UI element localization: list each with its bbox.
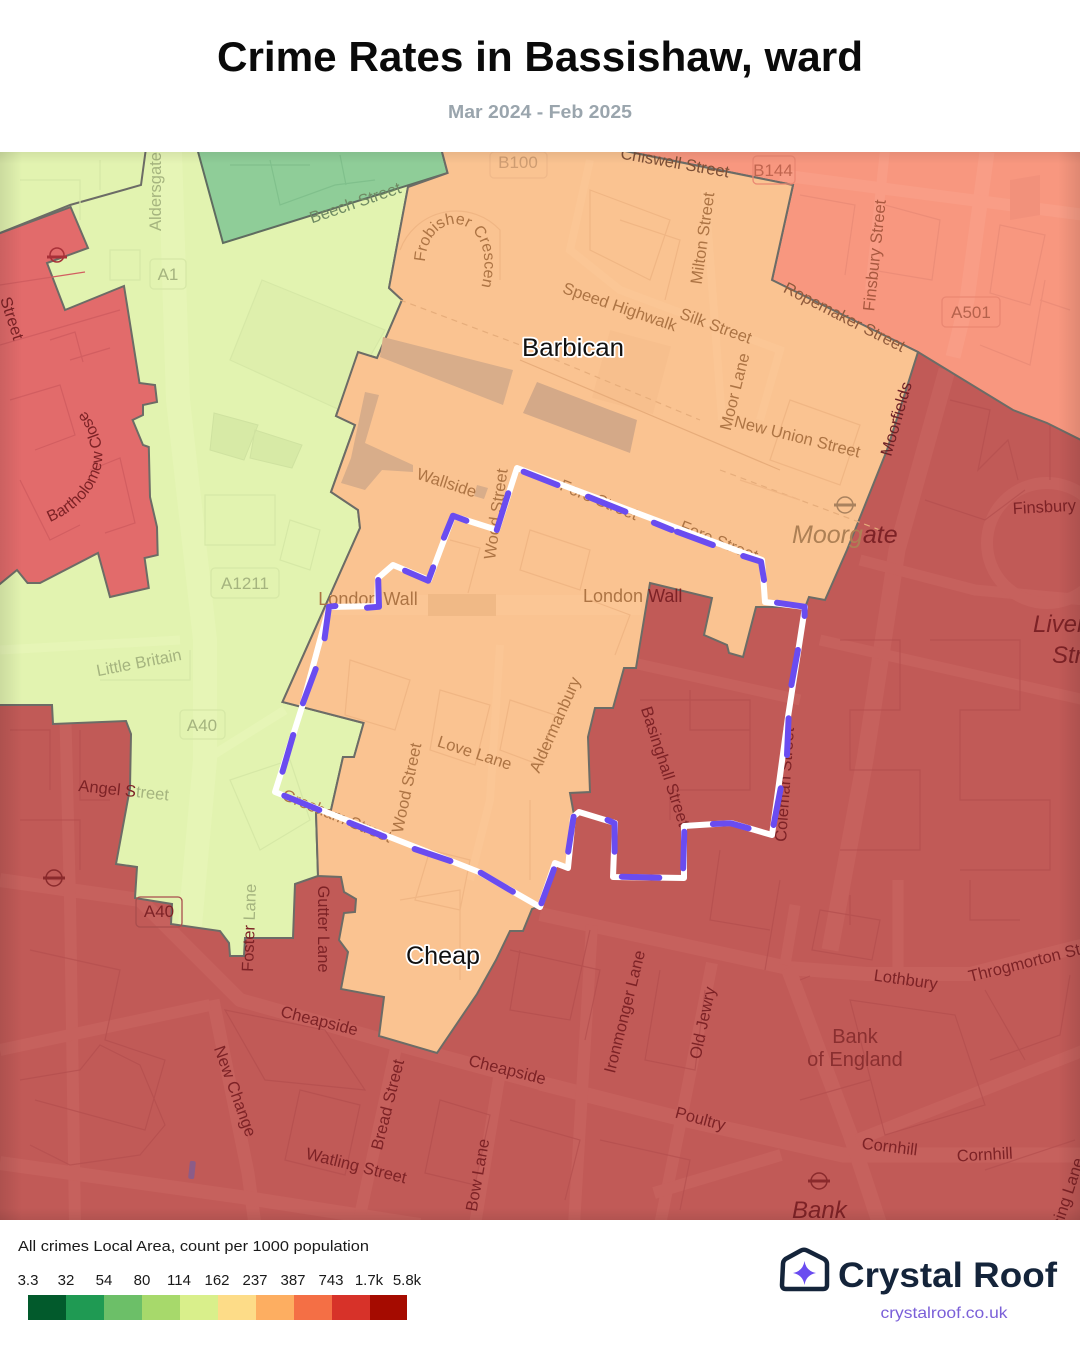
website: crystalroof.co.uk <box>880 1305 1009 1322</box>
street labels: orange area: New Union Street <box>732 413 863 462</box>
region: low crime lime wards <box>0 148 450 956</box>
title: Crime Rates in Bassishaw, ward <box>217 33 863 80</box>
street labels: red area: Bank <box>792 1197 849 1224</box>
street labels: red area: Cornhill <box>956 1145 1013 1165</box>
road numbers: A1211 <box>221 574 269 593</box>
ward labels: Barbican <box>522 334 624 362</box>
region: moderate crime orange wards <box>282 148 918 1053</box>
wordmark: Crystal Roof <box>838 1256 1057 1295</box>
street labels: orange area: Chiswell Street <box>619 145 731 182</box>
street labels: lime area <box>95 152 183 680</box>
street labels: red area: Basinghall Street <box>637 704 693 829</box>
street labels: red area: Watling Street <box>304 1145 409 1187</box>
street labels: orange area: Wallside <box>414 465 479 501</box>
street labels: red area: Bow Lane <box>463 1137 493 1213</box>
legend values: 743 <box>318 1272 344 1289</box>
region: high crime red west <box>0 207 158 597</box>
street labels: orange area: Milton Street <box>688 191 718 285</box>
street labels: red area: Old Jewry <box>687 984 720 1061</box>
street labels: red area: Ironmonger Lane <box>601 949 649 1075</box>
region: lowest crime green block <box>197 148 448 243</box>
road numbers: A40 <box>144 902 174 921</box>
legend values: 3.3 <box>18 1272 38 1289</box>
street labels: red area: Coleman Street <box>772 726 798 842</box>
legend values: 54 <box>96 1272 112 1289</box>
road numbers: B144 <box>753 161 793 180</box>
road numbers: A40 <box>187 716 217 735</box>
logo: Crystal Roof <box>782 1250 1057 1322</box>
legend values: 162 <box>204 1272 230 1289</box>
road numbers <box>144 153 991 921</box>
legend values: 80 <box>134 1272 150 1289</box>
street labels: red area: Bank <box>832 1026 879 1048</box>
region: very high crime, north east <box>610 148 1080 442</box>
street labels: red area: Moorfields <box>878 380 916 458</box>
legend values: 387 <box>280 1272 306 1289</box>
road shields <box>136 152 1000 927</box>
street labels: orange area: Moor Lane <box>717 351 753 432</box>
street labels: red area: Poultry <box>673 1104 728 1135</box>
legend values: 5.8k <box>393 1272 422 1289</box>
road numbers: A501 <box>951 303 991 322</box>
street labels: red area: Bartholomew Close <box>46 412 102 522</box>
roads and buildings: lime wards <box>0 148 385 925</box>
street labels: orange area: Ropemaker Street <box>781 279 908 356</box>
street labels: red area <box>1 297 1080 1272</box>
street labels: red area: Gutter Lane <box>314 885 332 973</box>
street labels: red area: Lothbury <box>873 967 939 994</box>
street labels: red area: Finsbury <box>1012 497 1077 518</box>
street labels: orange area: Aldermanbury <box>526 674 585 776</box>
boundary purple dashes <box>282 472 805 903</box>
street labels: red area: Cornhill <box>861 1135 918 1159</box>
edge shading <box>0 152 1080 1220</box>
buildings: red west <box>0 272 135 540</box>
label: Foster Lane: Foster Lane <box>239 883 260 972</box>
street labels: red area: Cheapside <box>467 1052 548 1088</box>
subtitle: date range: Mar 2024 - Feb 2025 <box>448 102 632 122</box>
label: Angel Street: Angel Street <box>78 777 170 805</box>
legend values: 114 <box>167 1272 191 1289</box>
street labels: orange area: Speed Highwalk <box>560 279 680 335</box>
street labels: orange area: Love Lane <box>435 733 514 774</box>
street labels: red area: of England <box>807 1049 903 1071</box>
legend colour scale <box>28 1295 407 1320</box>
street labels: red area: Cheapside <box>279 1003 360 1039</box>
street labels: orange area <box>280 152 906 870</box>
legend values <box>18 1272 422 1289</box>
choropleth map <box>0 152 1080 1220</box>
ward labels: Cheap <box>406 942 480 970</box>
road numbers: B100 <box>498 153 538 172</box>
street labels: orange area: Gresham Street <box>280 786 395 847</box>
street labels: orange area: London Wall <box>318 589 418 609</box>
icon: Moorgate station <box>834 497 856 513</box>
icons: underground stations <box>43 248 830 1189</box>
buildings: high crime area <box>10 400 1075 1210</box>
roads: high crime area <box>0 370 1080 1225</box>
street labels: red area: New Change <box>210 1043 259 1139</box>
street labels: orange area: Silk Street <box>677 305 755 348</box>
orange ward details <box>330 160 880 980</box>
boundary white outline <box>275 468 805 907</box>
label: London Wall east: London Wall <box>583 586 682 606</box>
ward labels <box>406 334 624 970</box>
roads and buildings: north east <box>800 194 1070 366</box>
buildings: green block <box>230 155 375 205</box>
street labels: orange area: Wood Street <box>481 467 512 561</box>
legend title: All crimes Local Area, count per 1000 population <box>18 1238 369 1255</box>
marker: small purple mark <box>188 1161 196 1179</box>
Bassishaw ward boundary <box>275 468 805 907</box>
street labels: orange area: Fore Street <box>557 477 641 524</box>
street labels: orange area: Beech Street <box>307 179 404 227</box>
street labels: north east: Finsbury Street <box>860 198 890 312</box>
street labels: lime area: Aldersgate <box>147 152 165 231</box>
street labels: red area: Bread Street <box>368 1057 408 1152</box>
label: Moorgate: Moorgate <box>792 521 898 549</box>
icon: house with star <box>782 1250 827 1289</box>
street labels: lime area: Little Britain <box>95 646 183 680</box>
road numbers: A1 <box>158 265 178 284</box>
legend values: 1.7k <box>355 1272 384 1289</box>
legend <box>18 1238 422 1320</box>
street labels: orange area: Wood Street <box>389 741 426 835</box>
legend values: 32 <box>58 1272 74 1289</box>
legend values: 237 <box>242 1272 268 1289</box>
street labels: orange area: Fore Street <box>677 518 761 565</box>
